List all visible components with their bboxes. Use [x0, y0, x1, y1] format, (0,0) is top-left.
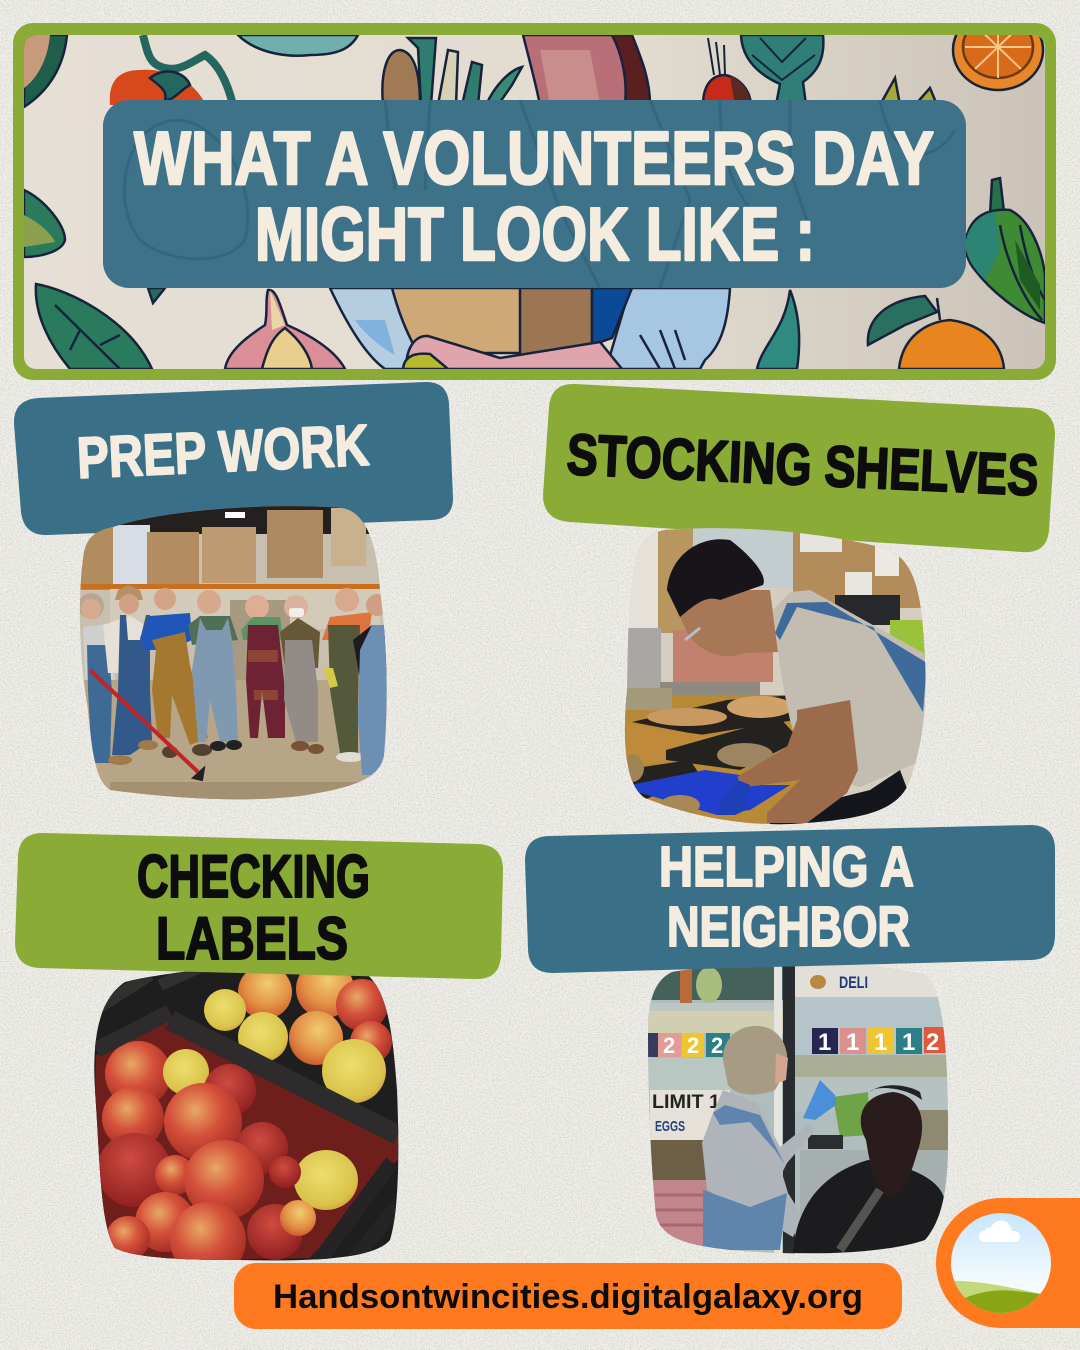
photo: helping at the fridge: 2 — [711, 1033, 723, 1058]
stocking shelves label — [543, 384, 1055, 552]
helping a neighbor heading: NEIGHBOR — [667, 895, 910, 959]
checking labels heading: LABELS — [156, 905, 348, 972]
photo: helping at the fridge: 1 — [818, 1029, 831, 1056]
photo: helping at the fridge: 1 — [846, 1029, 859, 1056]
panel: helping a neighbor — [525, 825, 1055, 1260]
checking labels label — [15, 833, 503, 979]
person six — [280, 595, 324, 754]
photo: helping at the fridge: 2 — [926, 1029, 939, 1056]
photo: stocking produce — [624, 528, 926, 824]
title box — [103, 100, 966, 288]
photo: helping at the fridge: 2 — [687, 1033, 699, 1058]
photo: helping at the fridge: 1 — [902, 1029, 915, 1056]
photo: crates of apples — [94, 972, 398, 1260]
helping a neighbor heading: HELPING A — [659, 835, 914, 899]
person three — [140, 588, 212, 758]
photo: volunteers in warehouse — [80, 506, 387, 800]
helping a neighbor heading — [659, 835, 914, 959]
photo: helping at the fridge: DELI — [839, 973, 868, 992]
green frame — [13, 23, 1056, 380]
website pill — [234, 1263, 902, 1329]
panel: stocking shelves — [543, 384, 1055, 830]
mural illustration — [24, 10, 1045, 369]
red broom — [90, 670, 204, 780]
logo badge — [936, 1198, 1080, 1328]
logo: sky and hills — [951, 1213, 1051, 1313]
person four — [188, 590, 242, 751]
helping a neighbor label — [525, 825, 1055, 973]
photo: helping at the fridge — [648, 965, 948, 1254]
checking labels heading: CHECKING — [137, 843, 370, 910]
person seven — [322, 588, 372, 762]
panel: checking labels — [15, 833, 503, 1278]
title — [134, 116, 934, 276]
prep work heading: PREP WORK — [76, 413, 370, 491]
website address: Handsontwincities.digitalgalaxy.org — [273, 1278, 863, 1316]
photo: helping at the fridge: EGGS — [655, 1118, 685, 1135]
photo: helping at the fridge: LIMIT 1 — [652, 1092, 720, 1113]
photo: helping at the fridge: 2 — [663, 1033, 675, 1058]
prep work label — [14, 382, 453, 535]
person two — [103, 585, 158, 765]
person one — [78, 593, 115, 763]
person five — [241, 595, 285, 738]
person eight — [353, 594, 390, 775]
checking labels heading — [137, 843, 370, 972]
photo: helping at the fridge: 1 — [874, 1029, 887, 1056]
title: MIGHT LOOK LIKE : — [255, 192, 815, 276]
panel: header mural — [13, 10, 1056, 380]
panel: prep work — [14, 382, 453, 810]
